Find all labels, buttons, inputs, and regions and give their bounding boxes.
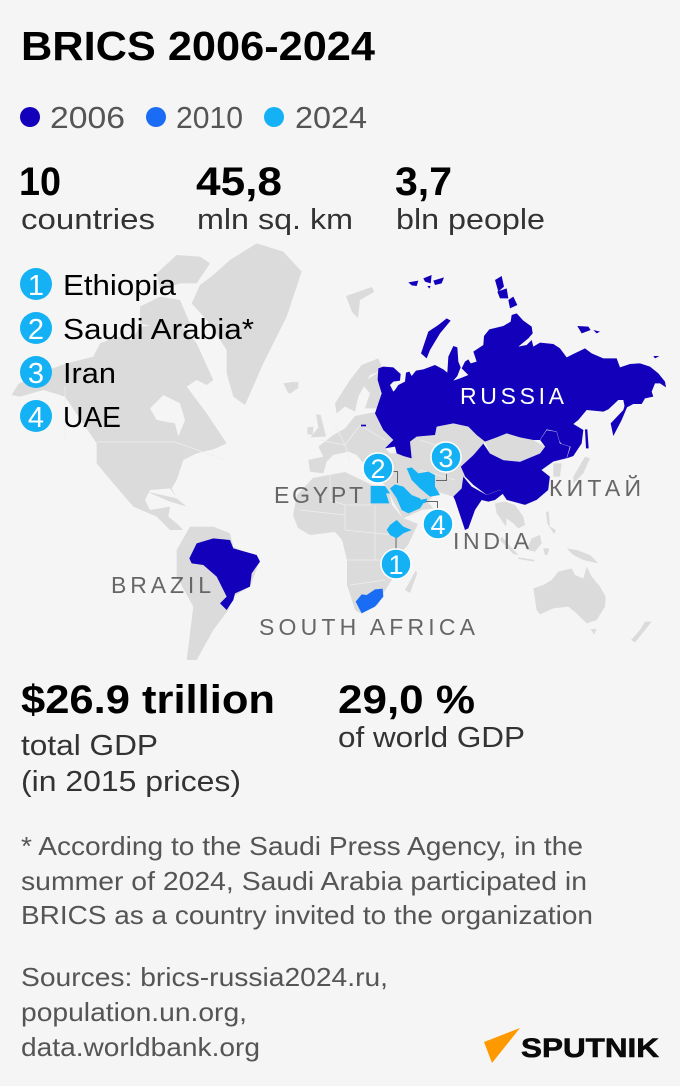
2024 member: Egypt	[371, 486, 390, 503]
stat: total GDP: total GDP	[21, 730, 158, 762]
legend item 2010	[146, 100, 243, 135]
2024 member: Iran	[407, 467, 440, 497]
map marker 1: 1	[388, 550, 404, 580]
map label: Brazil: BRAZIL	[111, 572, 211, 598]
sources	[21, 962, 388, 1062]
map marker 3: 3	[438, 443, 454, 473]
stat: share of world GDP: of world GDP	[338, 722, 525, 754]
list item: UAE: 4	[28, 402, 44, 434]
logo icon: orange arrowhead	[484, 1028, 520, 1063]
stat: countries: countries	[21, 204, 155, 236]
world map	[12, 243, 666, 660]
2006 members: Brazil	[189, 538, 260, 610]
footnote: BRICS as a country invited to the organization	[21, 900, 593, 930]
map marker 1	[381, 549, 411, 580]
grey landmass: Middle East	[372, 463, 433, 518]
stat: total GDP	[21, 678, 275, 798]
stat: area	[196, 160, 353, 236]
stat: share of world GDP: 29,0 %	[338, 678, 475, 722]
map marker 3	[431, 442, 461, 473]
legend item 2006	[20, 100, 125, 135]
stat: countries	[19, 160, 155, 236]
stat: population	[395, 160, 545, 236]
2010 member: South Africa	[356, 589, 383, 613]
2024 member: Saudi Arabia	[390, 484, 423, 513]
map marker 2: 2	[370, 454, 386, 484]
legend item 2006: 2006	[50, 100, 125, 135]
list item: Iran: Iran	[63, 358, 116, 390]
grey landmass: Asia	[383, 423, 590, 502]
stat: population: 3,7	[395, 160, 452, 204]
grey landmass: Svalbard	[346, 287, 374, 318]
map label: South Africa: SOUTH AFRICA	[259, 614, 476, 640]
map marker 4: 4	[430, 510, 446, 540]
sources: data.worldbank.org	[21, 1032, 260, 1062]
country borders	[65, 386, 455, 585]
list item: Saudi Arabia: 2	[28, 314, 44, 346]
footnote: summer of 2024, Saudi Arabia participated in	[21, 866, 587, 896]
2006 members: India	[453, 477, 503, 530]
grey landmass: Europe	[290, 358, 410, 473]
list item: Ethiopia: 1	[28, 270, 44, 302]
map marker 2	[363, 453, 393, 484]
list item: UAE: UAE	[63, 402, 121, 434]
map marker 4	[423, 509, 453, 540]
2024 member: Ethiopia	[387, 520, 412, 538]
connector lines	[394, 472, 446, 549]
list of new members	[20, 268, 254, 434]
list item: Iran: 3	[28, 358, 44, 390]
grey landmass: Americas	[12, 243, 302, 660]
stat: population: bln people	[396, 204, 545, 236]
list item: Saudi Arabia: Saudi Arabia*	[63, 314, 254, 346]
list item: Ethiopia	[20, 268, 177, 302]
list item: Iran	[20, 356, 116, 390]
stat: area: 45,8	[196, 160, 282, 204]
list item: UAE	[20, 400, 121, 434]
footnote: * According to the Saudi Press Agency, in the	[21, 831, 583, 861]
title: BRICS 2006-2024	[21, 23, 375, 69]
map label: Russia: RUSSIA	[460, 383, 565, 409]
legend item 2024	[264, 100, 367, 135]
2024 member: UAE	[420, 498, 427, 503]
map label: India: INDIA	[453, 528, 530, 554]
2006 members: Russia	[361, 275, 666, 458]
stat: share of world GDP	[338, 678, 525, 754]
Sputnik logo	[484, 1028, 660, 1063]
sources: population.un.org,	[21, 997, 247, 1027]
legend item 2010: 2010	[176, 100, 243, 135]
stat: countries: 10	[19, 160, 61, 204]
year legend	[20, 100, 367, 135]
2006 members: China	[461, 430, 570, 505]
map label: China: КИТАЙ	[549, 474, 641, 501]
grey landmass: Africa	[293, 472, 418, 613]
grey landmass: Southeast Asia and Oceania	[495, 502, 652, 642]
stat: total GDP: $26.9 trillion	[21, 678, 275, 722]
sources: Sources: brics-russia2024.ru,	[21, 962, 388, 992]
map label: Egypt: EGYPT	[274, 482, 363, 508]
list item: Ethiopia: Ethiopia	[63, 270, 177, 302]
stat: area: mln sq. km	[197, 204, 353, 236]
stat: total GDP: (in 2015 prices)	[21, 766, 241, 798]
footnote	[21, 831, 593, 930]
logo wordmark: SPUTNIK	[521, 1033, 660, 1063]
legend item 2024: 2024	[295, 100, 367, 135]
